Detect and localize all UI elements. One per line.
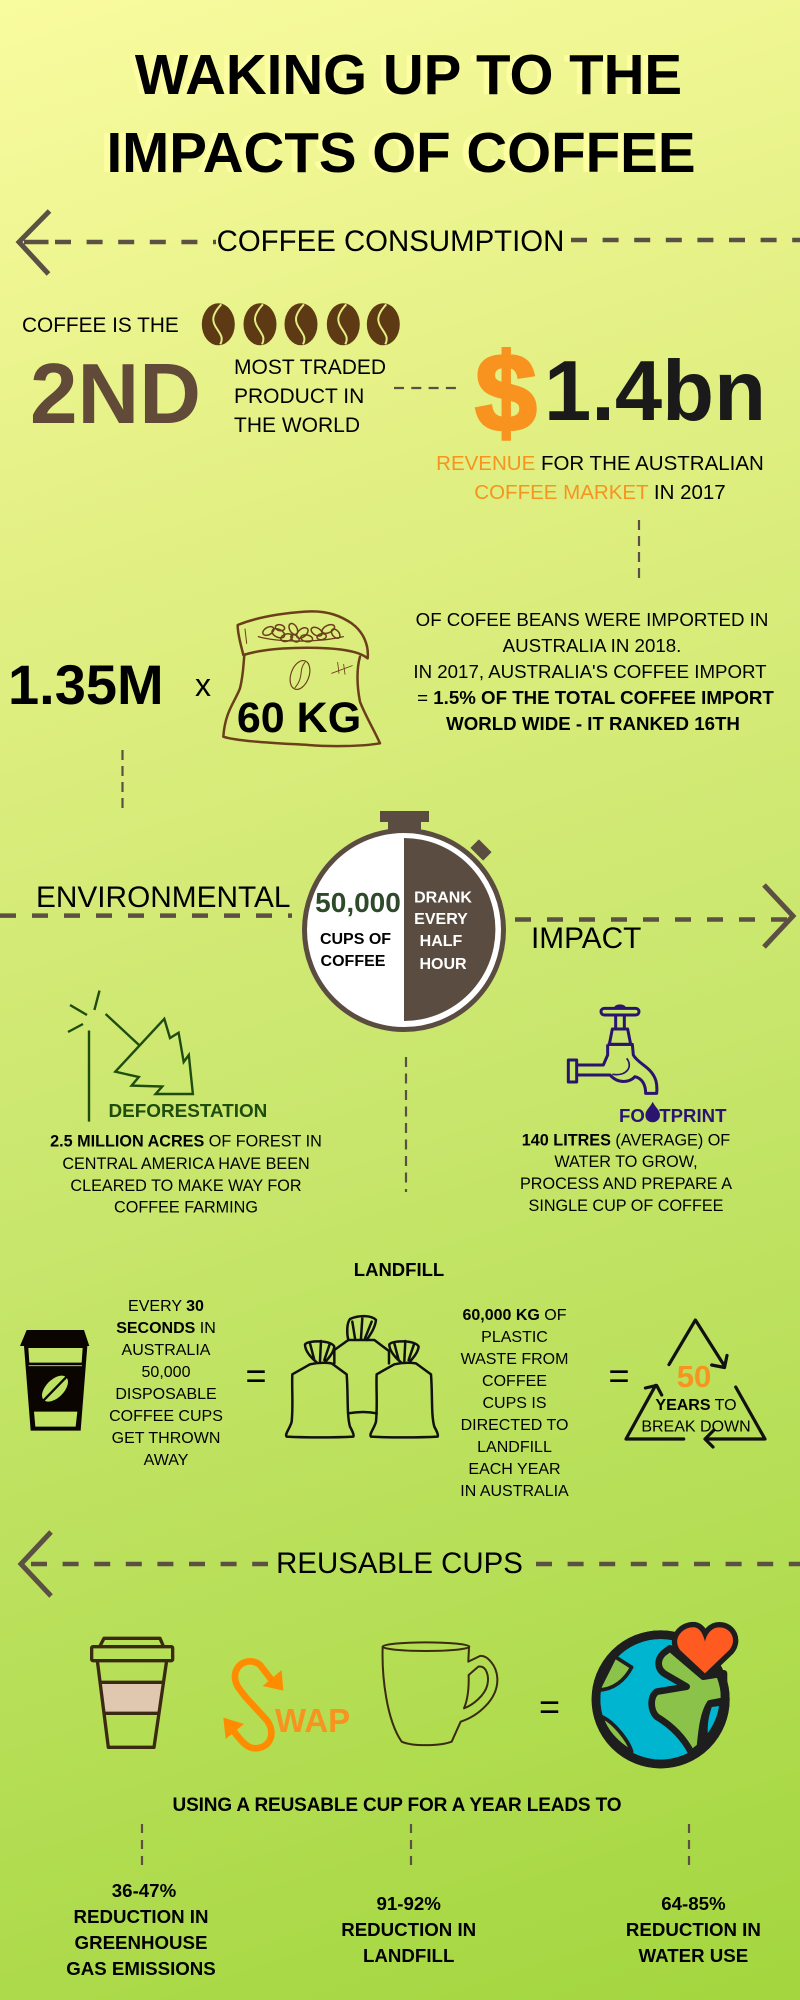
text: footprint description: 140 LITRES (AVERAGE) OF xyxy=(522,1131,730,1149)
divider: left dashed line xyxy=(0,913,292,918)
stat: water use: 64-85% xyxy=(661,1893,726,1914)
stat: water use: REDUCTION IN xyxy=(626,1919,761,1940)
text: 60,000 kg plastic waste: IN AUSTRALIA xyxy=(460,1483,569,1500)
icon: disposable cup xyxy=(20,1330,89,1431)
text: deforestation description: CLEARED TO MAKE WAY FOR xyxy=(70,1177,302,1195)
stat: landfill: 91-92% xyxy=(376,1893,441,1914)
text: most traded product: PRODUCT IN xyxy=(234,385,364,408)
icon: coffee sack xyxy=(223,611,380,746)
stat: landfill xyxy=(341,1893,476,1966)
text: every 30 seconds: COFFEE CUPS xyxy=(109,1408,223,1425)
heading: deforestation: DEFORESTATION xyxy=(108,1101,267,1122)
text: imports description: WORLD WIDE - IT RANKED 16TH xyxy=(446,713,740,734)
text: every 30 seconds: 50,000 xyxy=(142,1364,191,1381)
icon: five coffee beans xyxy=(202,303,400,345)
section header: environmental impact right xyxy=(515,885,793,955)
text: 50 years to break down xyxy=(641,1359,751,1436)
text: imports description: IN 2017, AUSTRALIA'S COFFEE IMPORT xyxy=(413,661,767,682)
text: every 30 seconds: AUSTRALIA xyxy=(122,1342,211,1359)
stat: greenhouse gas: GAS EMISSIONS xyxy=(66,1958,216,1979)
icon: tap xyxy=(568,1006,657,1093)
panel: deforestation xyxy=(50,991,322,1217)
arrow: left chevron with dashed line xyxy=(19,211,216,274)
panel: landfill xyxy=(20,1259,765,1500)
title: WAKING UP TO THE xyxy=(129,43,677,106)
stat: greenhouse gas: REDUCTION IN xyxy=(74,1906,208,1927)
text: footprint description: WATER TO GROW, xyxy=(554,1153,698,1171)
text: equals: = xyxy=(245,1355,267,1396)
icon: ceramic mug xyxy=(383,1642,497,1745)
text: revenue caption xyxy=(436,452,764,504)
text: 50 years to break down: YEARS TO xyxy=(655,1397,737,1414)
icon: dollar sign: $ xyxy=(475,332,537,455)
text: drank every half hour xyxy=(414,890,472,973)
text: 60,000 kg plastic waste: CUPS IS xyxy=(482,1395,547,1412)
text: footprint description xyxy=(520,1131,732,1215)
text: 50,000 cups of coffee xyxy=(315,887,401,970)
title: WAKING UP TO THE xyxy=(135,43,682,106)
text: deforestation description: CENTRAL AMERICA HAVE BEEN xyxy=(62,1155,310,1173)
text: 60,000 kg plastic waste: WASTE FROM xyxy=(461,1351,568,1368)
text: every 30 seconds: AWAY xyxy=(144,1452,189,1469)
stat: greenhouse gas: GREENHOUSE xyxy=(75,1932,207,1953)
title xyxy=(100,43,696,184)
text: 60,000 kg plastic waste: EACH YEAR xyxy=(468,1461,561,1478)
text: every 30 seconds xyxy=(109,1298,223,1469)
big number: 1.35M: 1.35M xyxy=(8,653,164,716)
text: footprint description: PROCESS AND PREPARE A xyxy=(520,1175,732,1193)
heading: impact: IMPACT xyxy=(531,922,641,955)
big number: 2ND: 2ND xyxy=(30,347,201,442)
icon: water drop xyxy=(645,1102,660,1122)
text: revenue caption: REVENUE FOR THE AUSTRALIAN xyxy=(436,452,764,475)
text: every 30 seconds: GET THROWN xyxy=(112,1430,220,1447)
stat: water use xyxy=(626,1893,761,1966)
icon: globe with heart xyxy=(596,1627,733,1764)
heading: landfill: LANDFILL xyxy=(354,1259,444,1280)
text: imports description: = 1.5% OF THE TOTAL COFFEE IMPORT xyxy=(417,687,774,708)
connector: three vertical dashes xyxy=(142,1824,689,1869)
text: imports description: OF COFEE BEANS WERE IMPORTED IN xyxy=(416,609,768,630)
icon: swap arrows xyxy=(223,1661,283,1748)
text: equals: = xyxy=(608,1355,630,1396)
text: 60,000 kg plastic waste: COFFEE xyxy=(482,1373,547,1390)
text: 60,000 kg plastic waste: DIRECTED TO xyxy=(461,1417,568,1434)
text: drank every half hour: HALF xyxy=(420,933,463,950)
text: most traded product xyxy=(234,356,386,437)
divider: right dashed line xyxy=(536,1562,800,1566)
text: most traded product: MOST TRADED xyxy=(234,356,386,379)
text: 60,000 kg plastic waste xyxy=(460,1307,569,1500)
stat: water use: WATER USE xyxy=(639,1945,748,1966)
icon: recycling arrows xyxy=(626,1320,765,1447)
panel: water footprint xyxy=(520,1006,732,1215)
icon: reusable takeaway cup xyxy=(92,1638,173,1747)
text: 60,000 kg plastic waste: 60,000 KG OF xyxy=(462,1307,567,1324)
text: drank every half hour: HOUR xyxy=(419,956,467,973)
panel: imports xyxy=(8,609,774,746)
stat: landfill: REDUCTION IN xyxy=(341,1919,476,1940)
text: every 30 seconds: EVERY 30 xyxy=(128,1298,204,1315)
text: 50,000 cups of coffee: CUPS OF xyxy=(320,931,391,948)
icon: stopwatch xyxy=(304,811,504,1030)
text: 60,000 kg plastic waste: LANDFILL xyxy=(477,1439,552,1456)
text: revenue caption: COFFEE MARKET IN 2017 xyxy=(474,481,726,504)
text: deforestation description: COFFEE FARMING xyxy=(114,1199,258,1217)
text: coffee is the: COFFEE IS THE xyxy=(22,314,179,337)
text: 50 years to break down: 50 xyxy=(677,1359,711,1394)
text: imports description xyxy=(413,609,774,734)
heading: reusable cups: REUSABLE CUPS xyxy=(276,1547,523,1580)
big number: 1.4bn: 1.4bn xyxy=(544,344,766,439)
stat: greenhouse gas: 36-47% xyxy=(112,1880,177,1901)
text: drank every half hour: DRANK xyxy=(414,890,472,907)
heading: coffee consumption: COFFEE CONSUMPTION xyxy=(217,225,564,258)
connector: vertical dashes xyxy=(638,520,640,581)
text: every 30 seconds: DISPOSABLE xyxy=(115,1386,217,1403)
stat: landfill: LANDFILL xyxy=(363,1945,454,1966)
section header: reusable cups xyxy=(21,1532,800,1596)
text: WAP: WAP xyxy=(275,1702,350,1739)
text: 60 KG: 60 KG xyxy=(237,694,361,742)
text: drank every half hour: EVERY xyxy=(414,911,468,928)
arrow: right chevron with dashed line xyxy=(515,885,793,947)
icon: falling tree xyxy=(68,991,193,1122)
text: equals: = xyxy=(539,1686,560,1727)
connector: vertical dashes xyxy=(121,750,124,811)
heading: footprint: FOOTPRINT xyxy=(619,1105,727,1126)
heading: using a reusable cup: USING A REUSABLE CUP FOR A YEAR LEADS TO xyxy=(172,1795,622,1816)
arrow: left chevron with dashed line xyxy=(21,1532,268,1596)
text: 60,000 kg plastic waste: PLASTIC xyxy=(481,1329,548,1346)
text: deforestation description xyxy=(50,1133,322,1217)
text: deforestation description: 2.5 MILLION ACRES OF FOREST IN xyxy=(50,1133,322,1151)
text: 50 years to break down: BREAK DOWN xyxy=(641,1418,751,1436)
panel: swap xyxy=(92,1627,733,1764)
panel: second most traded xyxy=(22,303,400,442)
panel: revenue xyxy=(436,332,766,504)
title: IMPACTS OF COFFEE xyxy=(106,121,696,184)
panel: reusable cup results xyxy=(66,1795,761,1979)
text: imports description: AUSTRALIA IN 2018. xyxy=(503,635,681,656)
divider: right dashed line xyxy=(571,238,800,242)
connector: short dashes xyxy=(394,387,456,389)
text: footprint description: SINGLE CUP OF COFFEE xyxy=(529,1197,724,1215)
icon: waste bags xyxy=(286,1316,438,1437)
text: multiply sign: x xyxy=(195,667,211,703)
stat: greenhouse gas xyxy=(66,1880,216,1979)
section header: coffee consumption xyxy=(19,211,800,274)
heading: environmental: ENVIRONMENTAL xyxy=(36,881,290,914)
text: most traded product: THE WORLD xyxy=(234,414,360,437)
text: every 30 seconds: SECONDS IN xyxy=(116,1320,216,1337)
title: IMPACTS OF COFFEE xyxy=(100,121,690,184)
connector: vertical dashes xyxy=(405,1057,407,1192)
text: 50,000 cups of coffee: 50,000 xyxy=(315,887,401,918)
text: 50,000 cups of coffee: COFFEE xyxy=(321,953,386,970)
